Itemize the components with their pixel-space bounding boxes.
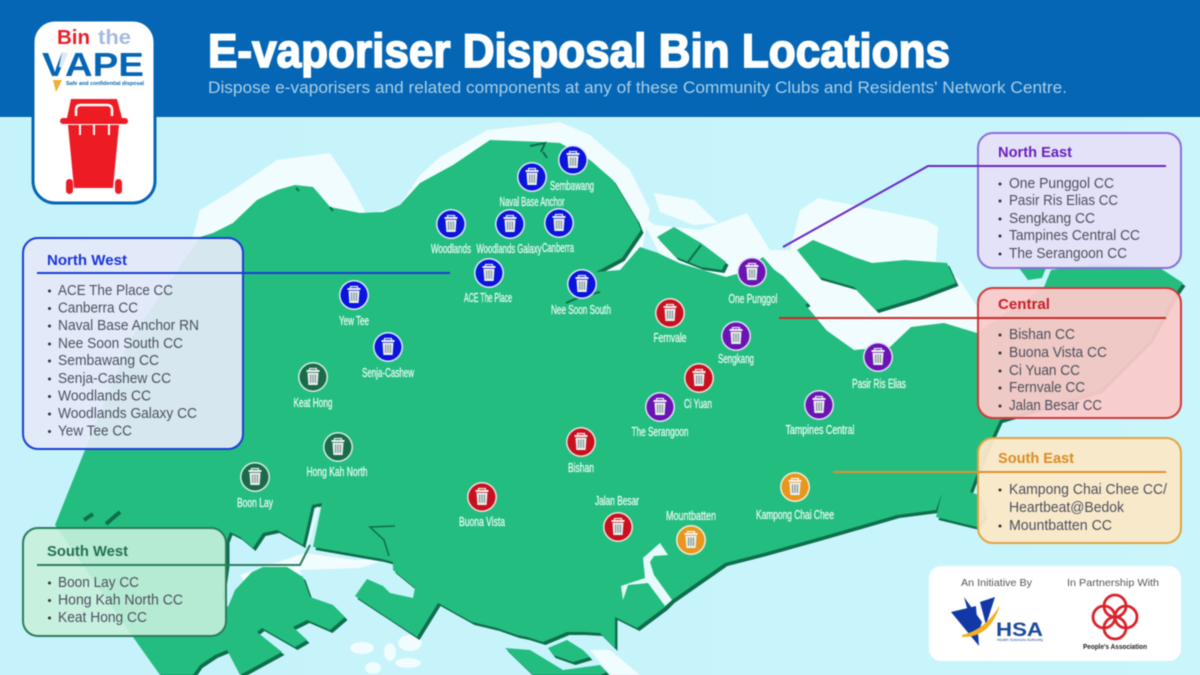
Central list: Ci Yuan CC [1009,363,1080,379]
panel: North West: North West [47,252,127,269]
North West pins: Sembawang [550,179,594,193]
Central pins: Buona Vista [459,515,505,529]
title: E-vaporiser Disposal Bin Locations [208,24,950,77]
Central pins: Jalan Besar [595,494,639,508]
header band [0,0,1200,117]
North West list: Woodlands CC [58,388,151,404]
partner logos box: In Partnership With [1067,577,1159,589]
North West pins: Yew Tee [339,314,369,328]
South West list: Keat Hong CC [58,610,147,626]
North East list: The Serangoon CC [1009,246,1127,262]
South West list: Boon Lay CC [58,575,139,591]
North West pins: ACE The Place [464,291,512,305]
logo: HSA [951,597,1043,646]
Marina inlet [621,543,672,606]
North East list: One Punggol CC [1009,176,1114,192]
North West pins [339,145,611,380]
North West pins: Nee Soon South [551,303,611,317]
logo: HSA: HSA [996,620,1043,641]
logo: Bin the Vape [33,20,155,203]
North East pins [632,257,906,439]
South East list [998,482,1168,534]
logo: HSA: Health Sciences Authority [997,637,1043,642]
Central list: Buona Vista CC [1009,345,1107,361]
icon: red bin [60,99,128,194]
bin pins [237,145,906,555]
panel: South West: South West [47,543,128,560]
land [55,140,1183,675]
coast shadow [58,143,1186,675]
North West pins: Naval Base Anchor [500,195,564,209]
logo: People's Association [1083,595,1147,651]
North West list: Naval Base Anchor RN [58,318,199,334]
South East list: Mountbatten CC [1009,518,1112,534]
North West pins: Woodlands [431,242,471,256]
North West list: ACE The Place CC [58,283,173,299]
Central list [998,327,1107,414]
North East pins: The Serangoon [632,425,689,439]
South East list: Kampong Chai Chee CC/ [1009,482,1168,498]
North East pins: Tampines Central [786,423,854,437]
partner logos box [929,566,1181,661]
Central pins: Fernvale [654,331,687,345]
logo: Bin the Vape: the [98,27,131,49]
North West list [48,283,199,440]
South East pins: Mountbatten [666,509,716,523]
panel: North West [23,238,450,449]
North West list: Nee Soon South CC [58,336,183,352]
North East pins: One Punggol [728,292,778,306]
logo: Bin the Vape: Safe and confidential disposal [66,81,145,87]
South East pins: Kampong Chai Chee [756,508,834,522]
North East pins: Sengkang [718,352,754,366]
North East list [998,176,1140,262]
North West list: Canberra CC [58,300,138,316]
Central list: Jalan Besar CC [1009,398,1102,414]
North West list: Senja-Cashew CC [58,371,171,387]
North West list: Yew Tee CC [58,424,132,440]
South West list: Hong Kah North CC [58,592,183,608]
South West list [48,575,183,626]
North West pins: Woodlands Galaxy [476,242,542,256]
South West pins: Hong Kah North [306,465,368,479]
North East list: Pasir Ris Elias CC [1009,193,1118,209]
North West pins: Canberra [542,241,574,255]
North West list: Sembawang CC [58,353,159,369]
panel: Central [779,288,1181,418]
panel: North East: North East [998,144,1072,161]
subtitle: Dispose e-vaporisers and related components at any of these Community Clubs and Residents' Network Centre. [208,79,1067,97]
Central pins: Ci Yuan [684,397,712,411]
shallow water fringes [192,122,977,675]
Central pins [459,298,714,542]
South West pins: Keat Hong [294,396,333,410]
logo: Bin the Vape: VAPE [42,46,144,83]
South East list: Heartbeat@Bedok [1009,500,1125,516]
South West pins [237,362,368,510]
North West list: Woodlands Galaxy CC [58,406,197,422]
panel: Central: Central [998,296,1050,313]
coastal details [84,143,701,556]
South East pins [666,472,834,555]
panel: South West [23,528,310,636]
North East list: Tampines Central CC [1009,228,1140,244]
panel: North East [783,133,1181,268]
North East pins: Pasir Ris Elias [852,377,906,391]
panel: South East [833,438,1181,543]
Central pins: Bishan [568,461,594,475]
map: Singapore [55,122,1186,675]
North East list: Sengkang CC [1009,211,1095,227]
Kranji reservoir channel [307,507,318,546]
Central list: Fernvale CC [1009,380,1085,396]
logo: People's Association: People's Association [1083,642,1147,651]
partner logos box: An Initiative By [961,577,1033,589]
logo: Bin the Vape: Bin [57,27,90,49]
North West pins: Senja-Cashew [362,366,415,380]
panel: South East: South East [998,450,1074,467]
Central list: Bishan CC [1009,327,1075,343]
South West pins: Boon Lay [237,496,274,510]
